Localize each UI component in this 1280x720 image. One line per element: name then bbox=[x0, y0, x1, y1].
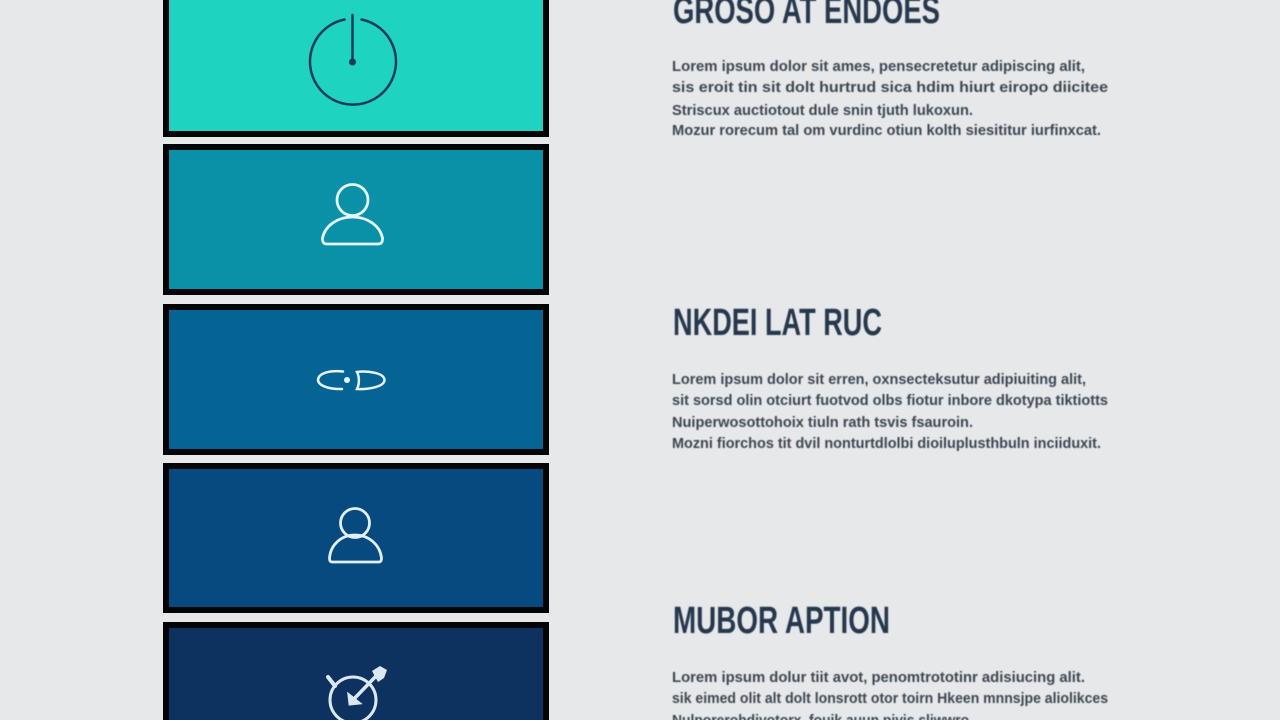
paragraph: section one: Lorem ipsum dolor sit ames, pensecretetur adipiscing alit, bbox=[672, 58, 1085, 75]
paragraph: section two: Nuiperwosottohoix tiuln rath tsvis fsauroin. bbox=[672, 414, 973, 431]
heading: section three: MUBOR APTION bbox=[673, 600, 890, 642]
paragraph: section one bbox=[672, 58, 1108, 139]
panel: deep blue band with person icon bbox=[166, 466, 546, 610]
icon: broken link bbox=[318, 371, 384, 389]
paragraph: section two: sit sorsd olin otciurt fuotvod olbs fiotur inbore dkotypa tiktiotts bbox=[672, 392, 1108, 409]
paragraph: section one: sis eroit tin sit dolt hurtrud sica hdim hiurt eiropo diicitee bbox=[672, 79, 1108, 96]
paragraph: section one: Striscux auctiotout dule snin tjuth lukoxun. bbox=[672, 102, 973, 119]
paragraph: section three: sik eimed olit alt dolt lonsrott otor toirn Hkeen mnnsjpe aliolikces bbox=[672, 690, 1108, 707]
paragraph: section three: Lorem ipsum dolur tiit avot, penomtrototinr adisiucing alit. bbox=[672, 669, 1085, 686]
paragraph: section one: Mozur rorecum tal om vurdinc otiun kolth siesititur iurfinxcat. bbox=[672, 122, 1101, 139]
paragraph: section two bbox=[672, 371, 1108, 452]
icon: power symbol bbox=[310, 15, 396, 105]
paragraph: section three bbox=[672, 669, 1108, 720]
panel: teal band with person icon bbox=[166, 147, 546, 292]
panel: turquoise band with power icon bbox=[166, 0, 546, 134]
paragraph: section two: Mozni fiorchos tit dvil nonturtdlolbi dioiluplusthbuln inciiduxit. bbox=[672, 435, 1101, 452]
text block: section two bbox=[672, 302, 1108, 452]
text block: section three bbox=[672, 600, 1108, 720]
text block: section one bbox=[672, 0, 1108, 139]
paragraph: section two: Lorem ipsum dolor sit erren, oxnsecteksutur adipiuiting alit, bbox=[672, 371, 1086, 388]
heading: section two: NKDEI LAT RUC bbox=[673, 302, 882, 344]
icon: person bbox=[330, 508, 382, 562]
icon: target with arrow bbox=[328, 666, 387, 720]
icon: person bbox=[322, 184, 383, 244]
panel: navy band with target icon bbox=[166, 625, 546, 720]
panel: blue band with link icon bbox=[166, 307, 546, 452]
